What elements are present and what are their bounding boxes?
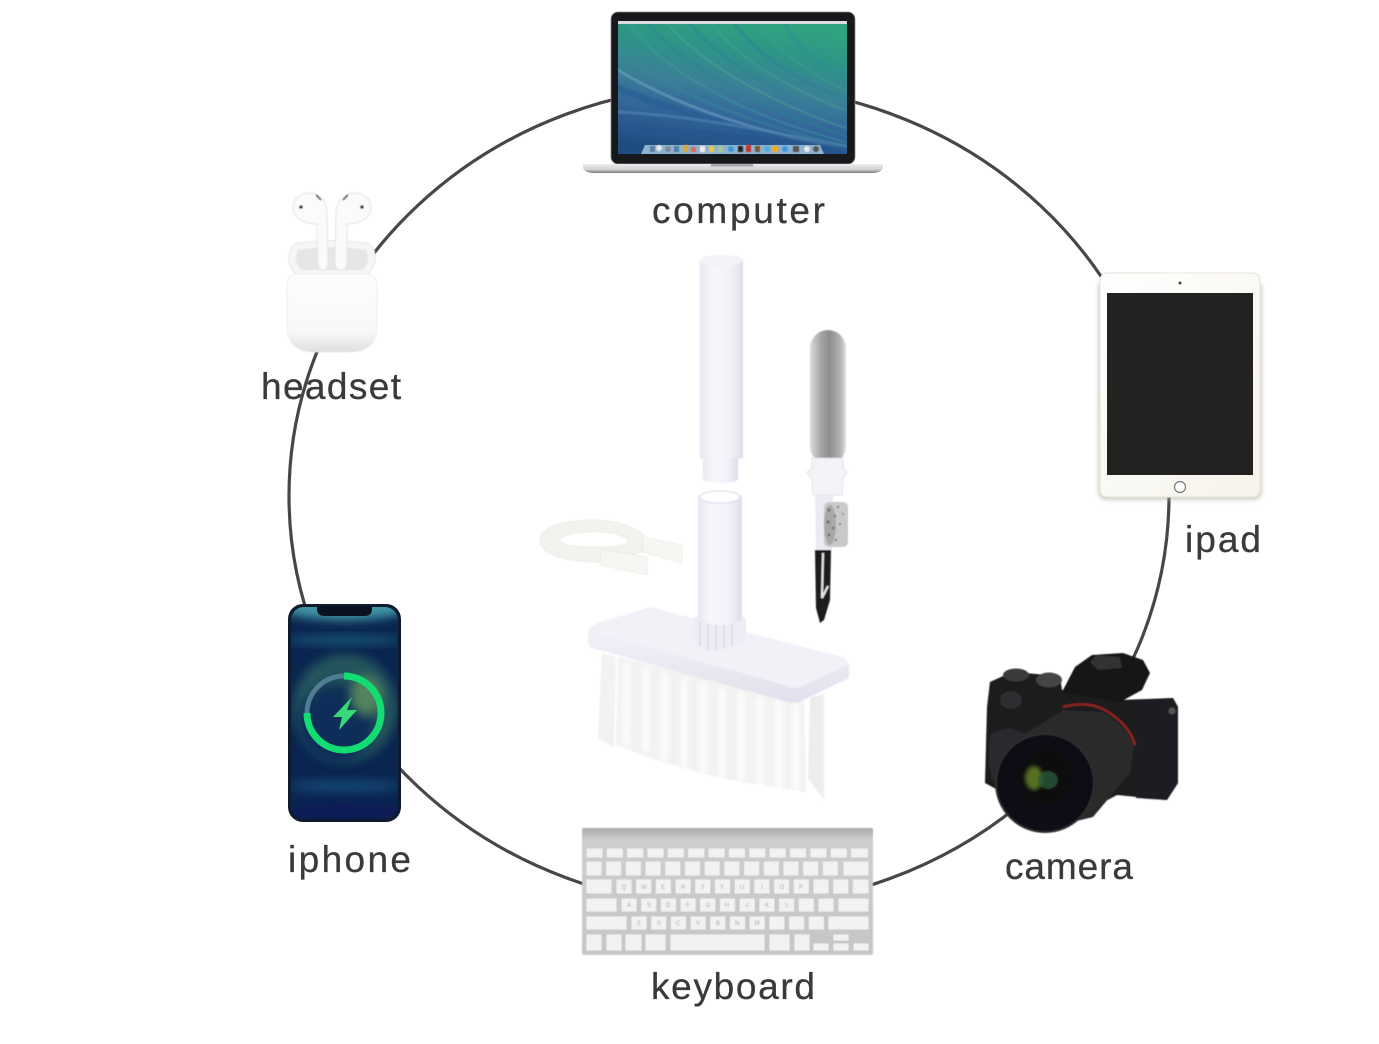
laptop lid <box>611 12 855 164</box>
ipad home button <box>1174 482 1186 492</box>
pen body <box>815 495 833 550</box>
phone wallpaper <box>291 607 398 819</box>
camera right panel <box>1136 698 1178 800</box>
keycap puller ring <box>540 520 682 575</box>
lens front ring <box>996 734 1094 832</box>
case lid <box>289 241 375 276</box>
key legends: U <box>740 885 744 891</box>
right earbud <box>335 193 371 270</box>
lens mount red ring <box>1063 704 1135 745</box>
key legends: I <box>761 885 763 891</box>
letter row 2 <box>586 898 869 912</box>
lens barrel <box>1010 710 1134 830</box>
lightning bolt <box>333 697 357 730</box>
laptop screen <box>618 21 847 154</box>
lower tube opening <box>700 491 740 503</box>
camera grip texture <box>989 728 1026 790</box>
charging ring progress <box>307 676 381 750</box>
left earbud <box>293 193 328 270</box>
laptop notch <box>711 164 753 166</box>
key legends: A <box>627 903 631 909</box>
pen collar <box>807 458 847 495</box>
connecting ring <box>289 85 1169 907</box>
lens inner glass <box>1038 771 1058 789</box>
camera body <box>985 672 1178 812</box>
key legends: T <box>701 885 705 891</box>
number row <box>586 861 869 876</box>
ipad screen <box>1107 293 1253 475</box>
letter row 3 <box>586 916 869 930</box>
key legends: B <box>716 921 720 927</box>
case body <box>287 274 377 352</box>
label: headset: headset <box>261 366 402 407</box>
key legends: G <box>706 903 711 909</box>
label: camera: camera <box>1005 846 1133 887</box>
handle cap <box>700 255 742 267</box>
wallpaper waves <box>618 24 846 152</box>
top dials <box>1000 668 1062 709</box>
key legends: H <box>725 903 729 909</box>
pick highlight <box>822 553 828 598</box>
phone notch <box>317 606 372 616</box>
key legends: Q <box>622 885 627 891</box>
menu bar <box>618 21 847 24</box>
sponge shadow <box>824 505 836 545</box>
key legends: W <box>641 885 647 891</box>
ipad body <box>1100 273 1260 497</box>
key legends: S <box>647 903 651 909</box>
device: camera <box>985 653 1178 832</box>
key legends: N <box>735 921 739 927</box>
device: headset <box>287 193 377 352</box>
lens reflection <box>1025 766 1043 790</box>
key legends <box>622 885 803 927</box>
collar ribs <box>700 622 732 650</box>
device: iphone <box>288 604 401 822</box>
key legends: C <box>676 921 681 927</box>
key legends: O <box>780 885 785 891</box>
case interior <box>296 247 368 270</box>
key legends: M <box>754 921 760 927</box>
label: iphone: iphone <box>288 839 411 880</box>
key legends: X <box>657 921 661 927</box>
ipad shadow <box>1098 280 1262 500</box>
brush collar <box>691 613 746 650</box>
phone frame <box>288 604 401 822</box>
label: ipad: ipad <box>1185 519 1261 560</box>
dock icons <box>650 145 819 152</box>
key legends: L <box>785 903 789 909</box>
pen sponge texture <box>826 506 844 541</box>
key legends: J <box>746 903 748 909</box>
key legends: Z <box>637 921 641 927</box>
label: keyboard: keyboard <box>651 966 815 1007</box>
key legends: E <box>661 885 665 891</box>
viewfinder hump <box>1062 653 1150 702</box>
bristles <box>598 653 824 800</box>
device: ipad <box>1098 273 1262 500</box>
bottom row <box>586 934 869 951</box>
key legends: V <box>696 921 700 927</box>
key legends: D <box>666 903 671 909</box>
pen metal pick <box>815 550 831 623</box>
key rows <box>586 848 869 951</box>
key legends: Y <box>720 885 724 891</box>
cleaning pen tip <box>810 330 846 464</box>
camera strap lug <box>1168 708 1176 714</box>
handle plug <box>703 458 738 484</box>
ipad camera <box>1178 282 1182 284</box>
laptop base <box>583 164 883 173</box>
charging ring track <box>307 676 381 750</box>
key legends: P <box>799 885 803 891</box>
upper handle <box>700 255 743 461</box>
letter row 1 <box>586 879 869 894</box>
label: computer: computer <box>652 190 825 231</box>
key legends: K <box>765 903 769 909</box>
hot shoe <box>1090 655 1122 670</box>
product: cleaning brush kit <box>540 255 849 800</box>
device: computer <box>583 12 883 173</box>
lower tube <box>698 491 742 625</box>
key legends: F <box>686 903 690 909</box>
pen sponge <box>824 502 848 547</box>
keyboard body <box>582 828 873 955</box>
lens glass <box>1019 750 1073 806</box>
function keys <box>586 848 869 858</box>
key legends: R <box>681 885 686 891</box>
dock <box>641 145 824 154</box>
device: keyboard <box>582 828 873 955</box>
brush base <box>588 607 849 702</box>
